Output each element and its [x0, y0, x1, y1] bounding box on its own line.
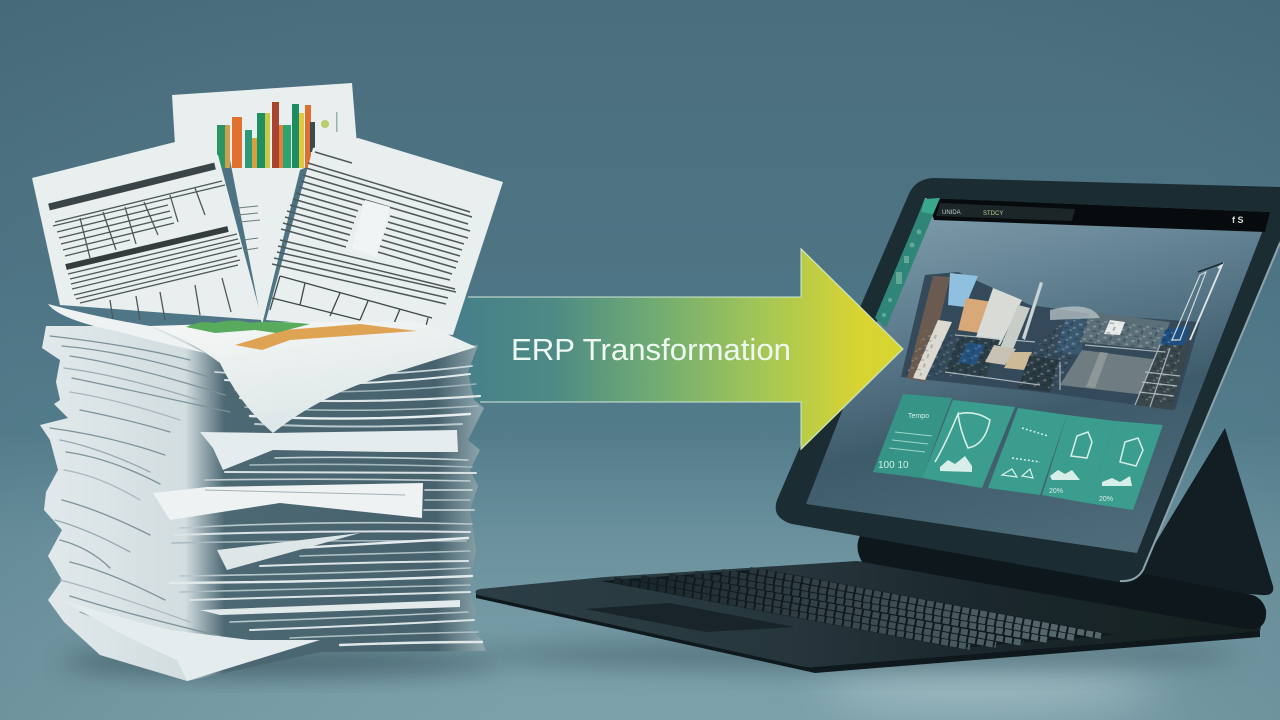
loose sheets in stack	[62, 430, 460, 681]
curled top sheet	[48, 304, 476, 433]
blank white box on sheet	[352, 200, 390, 257]
factory illustration	[901, 263, 1223, 410]
transformation arrow	[455, 248, 903, 450]
arrow label: ERP Transformation	[511, 332, 791, 367]
tablet body	[776, 178, 1280, 583]
hinge	[858, 532, 1266, 629]
report sheet with bar chart	[172, 83, 357, 325]
stack body	[40, 326, 486, 681]
tablet	[776, 178, 1280, 583]
left table sheet	[32, 142, 262, 320]
paper stack	[40, 326, 500, 681]
top bar: f S	[1232, 215, 1244, 225]
dashboard card 1: Tempo	[908, 413, 929, 420]
dashboard card 3	[988, 408, 1067, 495]
top bar: STDCY	[983, 211, 1003, 217]
laptop keyboard base	[475, 561, 1262, 673]
sidebar	[875, 198, 940, 328]
dashboard card 4	[1042, 415, 1115, 503]
dashboard card 1	[873, 394, 952, 478]
dashboard card 4: 20%	[1049, 488, 1063, 495]
dashboard card 2	[922, 400, 1015, 488]
tablet screen	[806, 198, 1270, 553]
dashboard card 1: 100 10	[878, 460, 909, 471]
bar chart	[217, 102, 338, 168]
dashboard card 5: 20%	[1099, 496, 1113, 503]
form grid	[270, 276, 432, 330]
light streaks on dark right side	[170, 366, 482, 645]
top bar: UNIDA	[942, 210, 961, 216]
mini chart on curled sheet	[186, 320, 417, 350]
dashboard card 5	[1087, 421, 1163, 510]
top bar	[927, 198, 1270, 232]
right table sheet	[266, 138, 503, 335]
trackpad	[585, 603, 795, 632]
tablet stand	[1130, 428, 1273, 595]
keyboard keys	[601, 569, 1114, 648]
gray streaks on light left side	[50, 336, 230, 650]
